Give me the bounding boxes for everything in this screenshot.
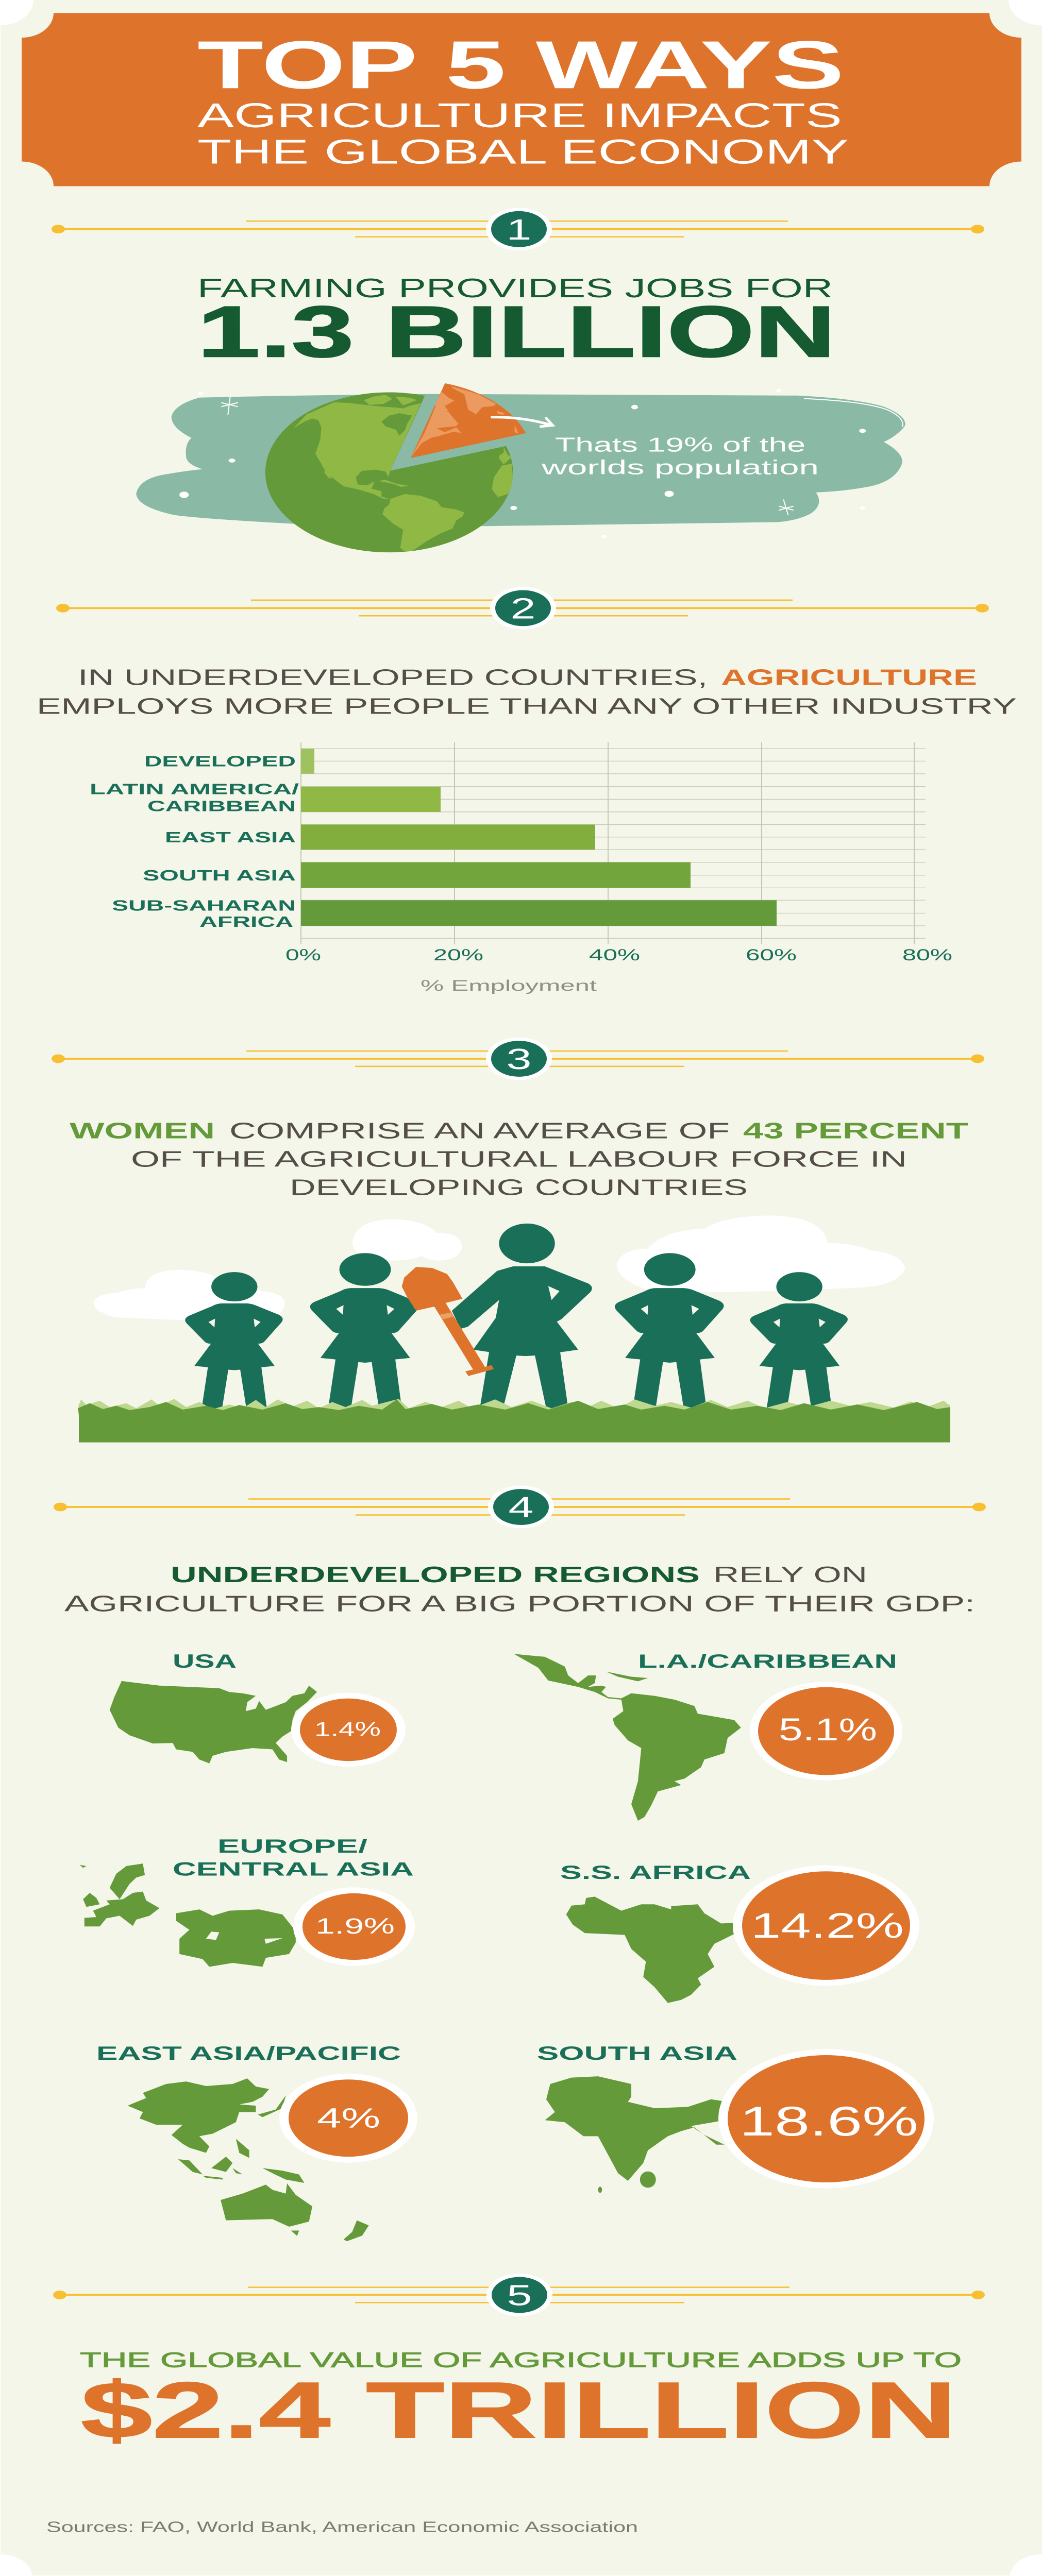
label: East Asia / Pacific: EAST ASIA/PACIFIC [96,2043,401,2064]
section 2 heading: IN UNDERDEVELOPED COUNTRIES, [78,665,708,690]
map: South Asia [545,2076,728,2193]
axis title: % Employment [421,977,597,994]
category labels: EAST ASIA [165,829,296,845]
section 5 heading: THE GLOBAL VALUE OF AGRICULTURE ADDS UP TO [80,2349,962,2372]
category labels: SOUTH ASIA [143,867,296,884]
section 3 heading [70,1118,968,1200]
section 4 heading: AGRICULTURE FOR A BIG PORTION OF THEIR GDP: [64,1591,975,1616]
map: East Asia and Pacific [128,2078,369,2241]
region: Latin America and Caribbean [514,1651,902,1821]
bubble: 1.9% [293,1887,415,1966]
bar: Sub-Saharan Africa [301,900,777,926]
bubble: 5.1%: 5.1% [779,1712,877,1747]
map: USA [110,1681,317,1764]
section 1 divider [52,208,984,250]
big number: $2.4 trillion: $2.4 TRILLION [81,2366,957,2454]
axis labels: 60% [746,946,797,964]
globe caption: Thats 19% of the [555,433,805,456]
axis labels: 20% [433,946,483,964]
Hudson Bay [381,413,412,436]
section 2 divider [56,587,989,630]
clouds [94,1215,905,1320]
section 3 heading: DEVELOPING COUNTRIES [290,1175,748,1200]
section 2 heading [37,665,1017,719]
section 3 heading: COMPRISE AN AVERAGE OF [229,1118,730,1143]
section 4 heading [64,1562,975,1616]
orange pie slice [411,383,526,458]
bubble: 14.2% [733,1866,919,1986]
woman 4 [615,1253,724,1409]
axis labels: 40% [589,946,640,964]
bar: developed [301,749,314,774]
section 4 heading: UNDERDEVELOPED REGIONS [171,1562,700,1587]
category labels: SUB-SAHARAN [112,897,296,913]
arrow from slice to caption [492,417,552,427]
section 3 heading: WOMEN [70,1118,215,1143]
title line 2: AGRICULTURE IMPACTS [197,96,842,135]
bubble: 1.4%: 1.4% [314,1718,381,1740]
big number: 1.3 billion: 1.3 BILLION [197,291,836,372]
section 5 divider [53,2274,985,2316]
category labels [90,753,299,930]
axis labels [285,946,952,964]
section 1 divider: 1 [507,213,531,246]
category labels: CARIBBEAN [147,798,296,815]
globe body [265,392,513,552]
grass strip [78,1399,950,1443]
cloud centre [352,1219,462,1261]
section 3 heading: OF THE AGRICULTURAL LABOUR FORCE IN [131,1146,907,1172]
globe caption [541,433,819,479]
bubble: 5.1% [750,1682,902,1781]
chart grid [301,742,926,944]
region: USA [110,1651,406,1767]
map: Latin America [514,1654,741,1821]
bubble: 14.2%: 14.2% [751,1906,904,1945]
globe caption: worlds population [541,456,819,479]
woman 3 centre [452,1224,592,1409]
teal brush blob with sparkles [136,388,905,538]
cloud left [94,1270,285,1320]
sources: Sources: FAO, World Bank, American Economic Association [46,2519,638,2535]
globe lands [294,395,514,552]
section 2 heading: EMPLOYS MORE PEOPLE THAN ANY OTHER INDUSTRY [37,693,1017,719]
map: Africa [566,1896,737,2003]
bar: Latin America [301,787,441,812]
label: Europe / Central Asia [173,1836,414,1880]
title line 3: THE GLOBAL ECONOMY [197,132,849,171]
cloud right [617,1215,905,1292]
axis labels: 0% [285,946,321,964]
bubble: 18.6%: 18.6% [740,2098,918,2144]
shovel [402,1267,494,1376]
category labels: AFRICA [199,913,293,930]
section 3 divider: 3 [507,1043,531,1075]
section 4 heading: RELY ON [713,1562,867,1587]
bar: South Asia [301,862,691,888]
region: South Asia [537,2043,934,2193]
category labels: DEVELOPED [144,753,296,770]
woman 5 [750,1272,848,1411]
woman 1 [185,1272,283,1411]
region: East Asia and Pacific [96,2043,417,2241]
bubble: 1.4% [291,1693,406,1767]
title line 1: TOP 5 WAYS [197,27,844,103]
bubble: 1.9%: 1.9% [315,1914,395,1938]
axis labels: 80% [902,946,952,964]
label: Europe / Central Asia: CENTRAL ASIA [173,1859,414,1880]
map: Europe and Central Asia [80,1863,296,1967]
category labels: LATIN AMERICA/ [90,781,299,798]
bar: East Asia [301,825,595,850]
section 2 heading: AGRICULTURE [721,665,977,690]
title banner [22,13,1021,186]
banner plaque [22,13,1021,186]
bubble: 4% [279,2074,417,2163]
section 3 heading: 43 PERCENT [743,1118,968,1143]
woman 2 [310,1253,419,1409]
bubble: 18.6% [718,2049,934,2189]
bubble: 4%: 4% [317,2103,380,2133]
label: South Asia: SOUTH ASIA [537,2043,737,2064]
region: Europe and Central Asia [80,1836,415,1967]
women figures [185,1224,848,1411]
label: L.A./Caribbean: L.A./CARIBBEAN [638,1651,897,1672]
globe with pie slice removed [265,392,514,552]
employment bar chart [90,742,952,994]
label: Europe / Central Asia: EUROPE/ [217,1836,368,1857]
region: Sub-Saharan Africa [560,1862,919,2003]
section 4 divider [54,1486,986,1528]
label: S.S. Africa: S.S. AFRICA [560,1862,751,1884]
section 1 heading: FARMING PROVIDES JOBS FOR [197,274,833,303]
section 4 divider: 4 [509,1491,533,1523]
section 3 divider [52,1038,984,1080]
label: USA: USA [173,1651,237,1672]
section 5 divider: 5 [507,2279,532,2312]
section 2 divider: 2 [511,592,535,625]
